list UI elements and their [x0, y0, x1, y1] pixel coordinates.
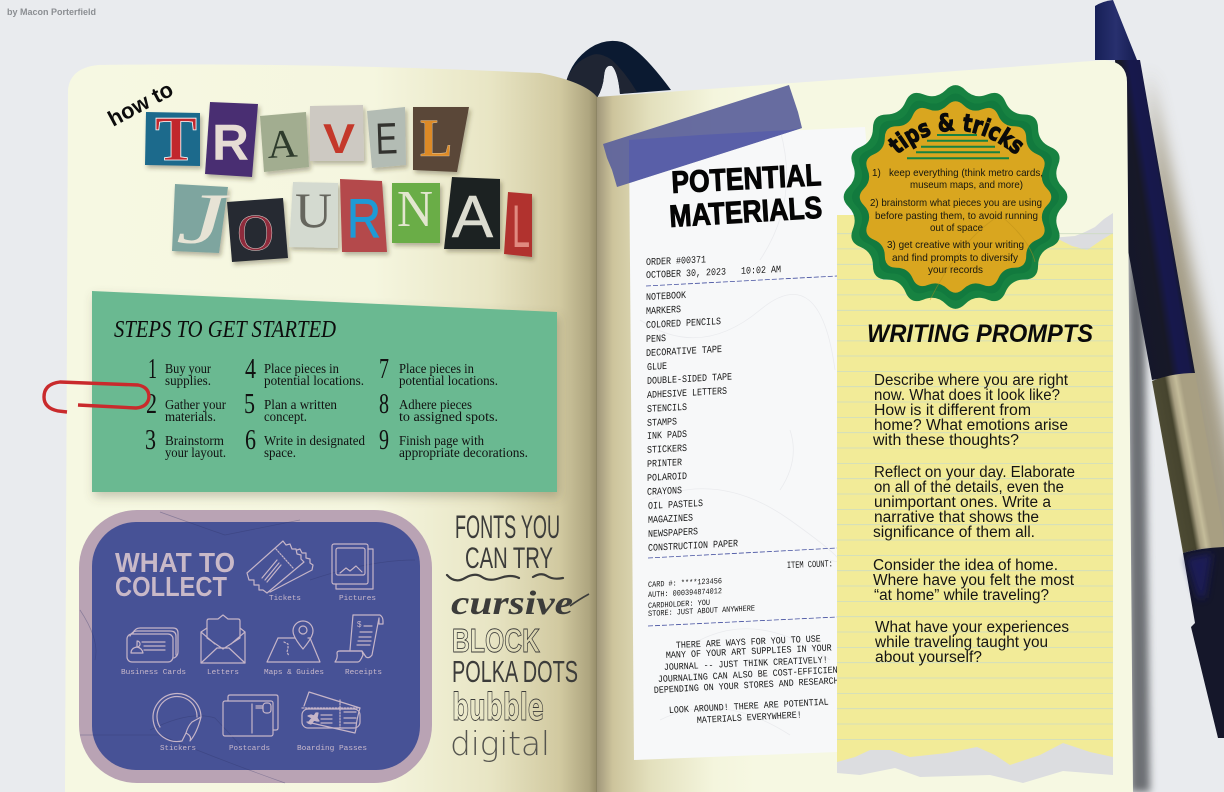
washi tape	[603, 85, 802, 187]
steps column two: 5	[244, 389, 255, 420]
materials list: INK PADS	[647, 430, 687, 443]
materials list: DECORATIVE TAPE	[646, 345, 722, 360]
card details: AUTH: 000394874012	[648, 587, 722, 600]
bubble sample: bubble	[452, 686, 544, 729]
receipt message: MANY OF YOUR ART SUPPLIES IN YOUR	[666, 642, 832, 661]
doodle heading: FONTS YOU	[455, 509, 560, 545]
right page	[596, 60, 1133, 792]
icon: business cards	[121, 628, 186, 677]
receipt message: JOURNAL -- JUST THINK CREATIVELY!	[664, 655, 828, 673]
receipt message: MATERIALS EVERYWHERE!	[697, 710, 802, 726]
panel: steps to get started	[92, 291, 557, 492]
tips list: your records	[928, 265, 983, 276]
word: travel	[145, 102, 469, 177]
prompt one: Describe where you are right	[874, 372, 1069, 389]
doodle heading	[447, 509, 563, 580]
torn grey paper edges	[837, 213, 1113, 783]
digital sample: digital	[450, 724, 550, 763]
icon: tickets	[247, 541, 313, 603]
materials list: ADHESIVE LETTERS	[647, 387, 727, 402]
yellow lined paper	[837, 215, 1113, 765]
prompt two: unimportant ones. Write a	[874, 494, 1051, 511]
prompt one	[872, 372, 1069, 449]
materials list: CRAYONS	[647, 486, 682, 499]
word: travel: R	[212, 114, 249, 171]
receipt message	[654, 633, 843, 726]
tips list: 3) get creative with your writing	[887, 240, 1024, 251]
steps column three: 9	[379, 425, 389, 456]
materials list: CONSTRUCTION PAPER	[648, 539, 738, 555]
icon: letters: Letters	[207, 669, 239, 677]
icon: postcards: Postcards	[229, 745, 270, 753]
tips list: 1) keep everything (think metro cards,	[872, 168, 1043, 179]
steps column three	[379, 354, 528, 460]
card details: CARD #: ****123456	[648, 577, 722, 590]
title: how to travel journal	[104, 76, 532, 262]
materials list: STICKERS	[647, 444, 687, 457]
steps column two: 6	[245, 425, 256, 456]
steps column one: Brainstorm	[165, 433, 224, 448]
pen	[1095, 0, 1224, 760]
materials list: PRINTER	[647, 458, 682, 471]
prompt two	[873, 464, 1075, 541]
item count: ITEM COUNT:	[787, 558, 833, 571]
book shadow	[1128, 240, 1150, 792]
word: travel: E	[375, 114, 398, 164]
prompt three: Consider the idea of home.	[873, 557, 1058, 574]
ruled lines	[837, 234, 1113, 739]
receipt heading: MATERIALS	[668, 190, 823, 234]
materials list: OIL PASTELS	[648, 499, 703, 513]
receipt heading	[668, 157, 823, 234]
fonts you can try doodles	[447, 509, 589, 763]
steps column two: Plan a written	[264, 397, 337, 412]
tips list: before pasting them, to avoid running	[875, 211, 1038, 222]
panel: what to collect	[79, 510, 432, 783]
icon: stickers: Stickers	[160, 745, 196, 753]
steps column three: 7	[379, 354, 389, 385]
panel: potential materials receipt	[629, 127, 880, 760]
steps column three: Place pieces in	[399, 361, 474, 376]
word: journal: N	[397, 181, 433, 238]
doodle heading: CAN TRY	[465, 542, 553, 575]
icon: maps and guides	[264, 621, 324, 677]
steps heading: STEPS TO GET STARTED	[114, 317, 336, 343]
steps column two: Write in designated	[264, 433, 365, 448]
steps column one: 2	[146, 389, 157, 420]
order details	[646, 252, 781, 282]
word: travel: A	[266, 120, 299, 167]
steps column two	[244, 354, 365, 460]
prompt one: now. What does it look like?	[874, 387, 1060, 404]
icon: red paperclip	[44, 382, 149, 412]
order details: OCTOBER 30, 2023 10:02 AM	[646, 265, 781, 282]
prompt four: What have your experiences	[875, 619, 1069, 636]
collect heading	[115, 547, 235, 602]
materials list: DOUBLE-SIDED TAPE	[647, 372, 732, 388]
icon: pictures: Pictures	[339, 595, 376, 603]
card details: CARDHOLDER: YOU	[648, 599, 710, 611]
collect heading: WHAT TO	[115, 547, 235, 578]
prompt one: with these thoughts?	[872, 432, 1019, 449]
icon: receipts: Receipts	[345, 669, 382, 677]
word: journal: L	[512, 193, 530, 260]
badge: tips and tricks	[844, 85, 1068, 309]
word: travel: L	[420, 108, 452, 168]
icon: receipts	[335, 615, 383, 677]
word: travel: V	[323, 115, 355, 162]
receipt message: DEPENDING ON YOUR STORES AND RESEARCH	[654, 675, 839, 696]
materials list: PENS	[646, 334, 666, 346]
word: journal: R	[347, 187, 381, 249]
icon: postcards	[223, 695, 278, 753]
receipt heading: POTENTIAL	[671, 157, 822, 200]
collect heading: COLLECT	[115, 571, 227, 602]
word: journal: A	[452, 184, 494, 250]
steps column three: Finish page with	[399, 433, 484, 448]
prompt two: on all of the details, even the	[874, 479, 1064, 496]
block sample: BLOCK	[452, 622, 540, 659]
receipt message: THERE ARE WAYS FOR YOU TO USE	[676, 633, 821, 651]
order details: ORDER #00371	[646, 255, 706, 269]
steps column three: Adhere pieces	[399, 397, 472, 412]
steps column three: 8	[379, 389, 389, 420]
icon: stickers	[153, 694, 201, 753]
word: travel: T	[155, 104, 197, 174]
steps column two: space.	[264, 445, 296, 460]
materials list	[646, 288, 738, 555]
materials list: GLUE	[647, 362, 667, 374]
materials list: STENCILS	[647, 403, 687, 416]
cursive sample: cursive	[451, 585, 573, 622]
prompt two: Reflect on your day. Elaborate	[874, 464, 1075, 481]
materials list: NOTEBOOK	[646, 291, 686, 304]
prompt two: significance of them all.	[873, 524, 1035, 541]
icon: boarding passes	[297, 692, 367, 753]
materials list: POLAROID	[647, 472, 687, 485]
steps column two: concept.	[264, 409, 307, 424]
icon: letters	[201, 615, 245, 677]
credit line: by Macon Porterfield	[7, 7, 96, 17]
tips list: 2) brainstorm what pieces you are using	[870, 198, 1042, 209]
word: journal	[172, 177, 532, 262]
card details	[648, 575, 755, 619]
how to: how to	[104, 76, 177, 131]
prompt one: home? What emotions arise	[874, 417, 1068, 434]
tips list: museum maps, and more)	[910, 180, 1023, 191]
tips list: out of space	[930, 223, 983, 234]
prompt four: while traveling taught you	[874, 634, 1048, 651]
icon: maps and guides: Maps & Guides	[264, 669, 324, 677]
card details: STORE: JUST ABOUT ANYWHERE	[648, 604, 755, 619]
bookmark ribbon	[566, 41, 671, 98]
steps column one: Gather your	[165, 397, 226, 412]
receipt message: LOOK AROUND! THERE ARE POTENTIAL	[669, 697, 829, 716]
steps column one: materials.	[165, 409, 216, 424]
tips list: and find prompts to diversify	[892, 253, 1019, 264]
word: journal: J	[176, 179, 231, 259]
steps column two: potential locations.	[264, 373, 364, 388]
materials list: MARKERS	[646, 305, 681, 318]
steps column one: 1	[148, 354, 157, 385]
materials list: COLORED PENCILS	[646, 317, 721, 332]
prompt three	[873, 557, 1075, 604]
steps column one: supplies.	[165, 373, 211, 388]
prompt two: narrative that shows the	[874, 509, 1039, 526]
steps column one: 3	[145, 425, 156, 456]
materials list: MAGAZINES	[648, 514, 693, 527]
materials list: STAMPS	[647, 417, 677, 430]
steps column one: Buy your	[165, 361, 211, 376]
prompt four: about yourself?	[875, 649, 982, 666]
icon: boarding passes: Boarding Passes	[297, 745, 367, 753]
icon: pictures	[332, 544, 376, 603]
steps column three: potential locations.	[399, 373, 498, 388]
steps column two: 4	[245, 354, 256, 385]
steps column two: Place pieces in	[264, 361, 339, 376]
prompt three: “at home” while traveling?	[874, 587, 1049, 604]
word: journal: U	[295, 182, 332, 238]
writing prompts heading: WRITING PROMPTS	[867, 320, 1093, 348]
steps column three: to assigned spots.	[399, 409, 498, 424]
left page	[65, 64, 597, 792]
steps column one	[145, 354, 226, 460]
polka dots sample: POLKA DOTS	[452, 654, 578, 689]
badge heading: tips & tricks	[888, 112, 1024, 154]
icon: tickets: Tickets	[269, 595, 301, 603]
materials list: NEWSPAPERS	[648, 527, 698, 541]
steps column three: appropriate decorations.	[399, 445, 528, 460]
steps column one: your layout.	[165, 445, 226, 460]
prompt one: How is it different from	[874, 402, 1031, 419]
prompt four	[874, 619, 1069, 666]
word: journal: O	[237, 205, 274, 262]
badge stripes	[907, 135, 1009, 158]
panel: writing prompts note	[837, 213, 1113, 783]
prompt three: Where have you felt the most	[873, 572, 1075, 589]
receipt message: JOURNALING CAN ALSO BE COST-EFFICIENT	[658, 664, 843, 685]
icon: business cards: Business Cards	[121, 669, 186, 677]
icon: receipts: $	[357, 620, 362, 629]
tips list	[870, 168, 1043, 276]
